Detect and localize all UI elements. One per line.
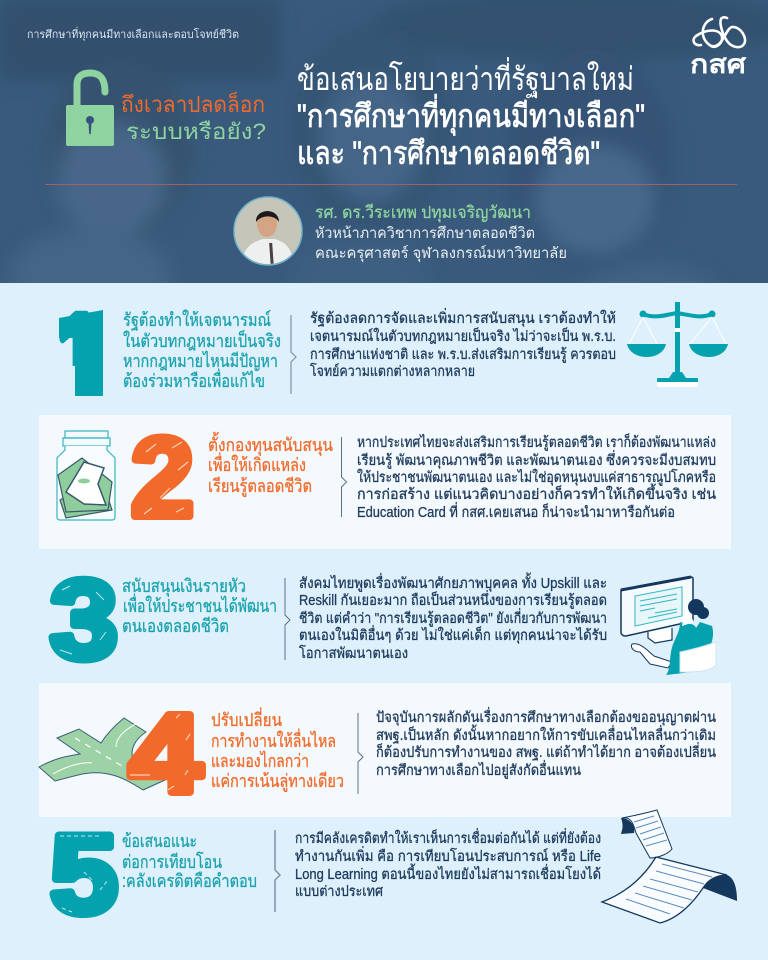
number 4: 4 (129, 691, 202, 816)
heading 5: ข้อเสนอแนะ (122, 831, 197, 851)
panel: proposal 2 (39, 415, 731, 549)
heading 5: :คลังเครดิตคือคำตอบ (122, 871, 257, 891)
number 2: 2 (131, 415, 194, 540)
heading 2: เพื่อให้เกิดแหล่ง (208, 452, 306, 475)
body text 3: สังคมไทยพูดเรื่องพัฒนาศักยภาพบุคคล ทั้ง Upskill และ (299, 572, 607, 592)
panel: proposal 5 (50, 810, 737, 937)
body text 5: การมีคลังเครดิตทำให้เราเห็นการเชื่อมต่อกันได้ แต่ที่ยังต้อง (295, 828, 601, 847)
heading 5 (122, 831, 257, 891)
icon: paper documents (602, 810, 737, 923)
logo (690, 17, 747, 79)
body text 1 (310, 308, 616, 380)
icon: jar of banknotes (57, 431, 115, 520)
number 3: 3 (50, 557, 118, 682)
heading 1 (123, 309, 281, 391)
badge heading: ระบบหรือยัง? (126, 119, 266, 144)
heading 3: สนับสนุนเงินรายหัว (122, 576, 246, 597)
body text 3: ชีวิต แต่คำว่า "การเรียนรู้ตลอดชีวิต" ยังเกี่ยวกับการพัฒนา (299, 608, 607, 627)
body text 5: Long Learning ตอนนี้ของไทยยังไม่สามารถเชื่อมโยงได้ (295, 863, 601, 883)
author details: หัวหน้าภาควิชาการศึกษาตลอดชีวิต (315, 225, 535, 242)
heading 1: หากกฎหมายไหนมีปัญหา (123, 350, 278, 371)
body text 2 (357, 432, 716, 521)
body text 4: สพฐ.เป็นหลัก ดังนั้นหากอยากให้การขับเคลื่อนไหลลื่นกว่าเดิม (376, 724, 716, 744)
badge heading: ถึงเวลาปลดล็อก (121, 90, 265, 117)
author details (315, 203, 567, 263)
body text 5: ทำงานกันเพิ่ม คือ การเทียบโอนประสบการณ์ หรือ Life (295, 846, 601, 865)
body text 1: รัฐต้องลดการจัดและเพิ่มการสนับสนุน เราต้องทำให้ (310, 308, 616, 327)
heading 5: ต่อการเทียบโอน (122, 851, 222, 872)
heading 2: ตั้งกองทุนสนับสนุน (208, 432, 333, 456)
body text 5 (295, 828, 601, 900)
body text 3 (299, 572, 607, 662)
author portrait (234, 197, 302, 270)
body text 1: โจทย์ความแตกต่างหลากหลาย (310, 362, 475, 380)
title: และ "การศึกษาตลอดชีวิต" (297, 135, 600, 171)
heading 1: ต้องร่วมหารือเพื่อแก้ไข (123, 368, 265, 391)
icon: scales of justice (627, 302, 728, 387)
author details: คณะครุศาสตร์ จุฬาลงกรณ์มหาวิทยาลัย (315, 245, 567, 263)
panel: proposal 3 (50, 557, 716, 682)
author details: รศ. ดร.วีระเทพ ปทุมเจริญวัฒนา (315, 203, 531, 223)
number 5: 5 (50, 812, 118, 937)
logo: กสศ (690, 49, 747, 79)
body text 2: การก่อสร้าง แต่แนวคิดบางอย่างก็ควรทำให้เกิดขึ้นจริง เช่น (357, 483, 716, 503)
body text 4: ปัจจุบันการผลักดันเรื่องการศึกษาทางเลือกต้องขออนุญาตผ่าน (376, 707, 716, 726)
panel: header (0, 0, 768, 283)
icon: open padlock (66, 73, 114, 146)
body text 2: Education Card ที่ กสศ.เคยเสนอ ก็น่าจะนำมาหารือกันต่อ (357, 502, 675, 521)
body text 1: เจตนารมณ์ในตัวบทกฎหมายเป็นจริง ไม่ว่าจะเป็น พ.ร.บ. (310, 326, 616, 345)
title: "การศึกษาที่ทุกคนมีทางเลือก" (297, 94, 645, 136)
body text 4: การศึกษาทางเลือกไปอยู่สังกัดอื่นแทน (376, 760, 581, 779)
body text 1: การศึกษาแห่งชาติ และ พ.ร.บ.ส่งเสริมการเรียนรู้ ควรตอบ (310, 346, 616, 363)
heading 4: แค่การเน้นลู่ทางเดียว (211, 771, 344, 792)
icon: person at computer (621, 577, 716, 675)
heading 4: ปรับเปลี่ยน (211, 707, 282, 730)
number 1: 1 (57, 291, 101, 416)
top caption: การศึกษาที่ทุกคนมีทางเลือกและตอบโจทย์ชีวิต (27, 26, 239, 41)
heading 2: เรียนรู้ตลอดชีวิต (208, 476, 312, 497)
body text 5: แบบต่างประเทศ (295, 884, 384, 900)
heading 4: และมองไกลกว่า (211, 750, 309, 771)
heading 3: ตนเองตลอดชีวิต (122, 616, 229, 636)
title: ข้อเสนอโยบายว่าที่รัฐบาลใหม่ (297, 57, 634, 99)
heading 3: เพื่อให้ประชาชนได้พัฒนา (123, 593, 277, 616)
title (297, 57, 645, 171)
heading 2 (208, 432, 333, 497)
body text 4 (376, 707, 716, 779)
header photo background: children looking up (0, 0, 768, 283)
icon: merging roads (39, 718, 165, 790)
panel: proposal 1 (50, 291, 728, 416)
panel: proposal 4 (39, 683, 731, 817)
body text 3: ตนเองในมิติอื่นๆ ด้วย ไม่ใช่แค่เด็ก แต่ทุกคนน่าจะได้รับ (299, 625, 607, 644)
body text 3: Reskill กันเยอะมาก ถือเป็นส่วนหนึ่งของการเรียนรู้ตลอด (299, 590, 607, 609)
badge heading (121, 90, 266, 144)
heading 4 (211, 707, 344, 792)
heading 3 (122, 576, 277, 636)
heading 4: การทำงานให้ลื่นไหล (211, 728, 336, 751)
heading 1: ในตัวบทกฎหมายเป็นจริง (123, 329, 281, 351)
body text 2: เรียนรู้ พัฒนาคุณภาพชีวิต และพัฒนาตนเอง ซึ่งควรจะมีงบสมทบ (357, 450, 716, 469)
body text 4: ก็ต้องปรับการทำงานของ สพฐ. แต่ถ้าทำได้ยาก อาจต้องเปลี่ยน (376, 742, 716, 761)
heading 1: รัฐต้องทำให้เจตนารมณ์ (123, 309, 271, 331)
body text 3: โอกาสพัฒนาตนเอง (299, 644, 408, 662)
